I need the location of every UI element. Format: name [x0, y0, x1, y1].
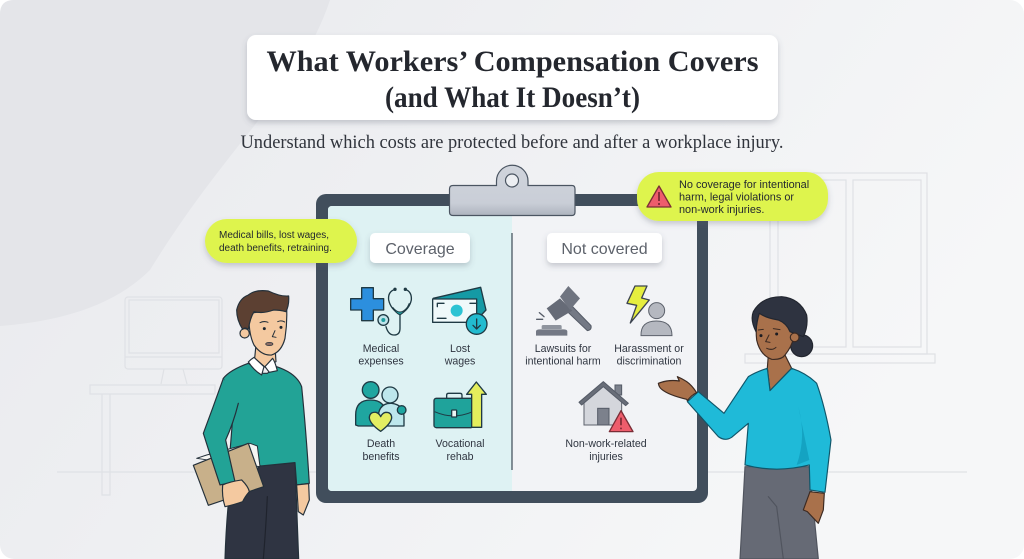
callout: covered summary: Medical bills, lost wages,	[219, 230, 329, 241]
heading: Not covered	[547, 233, 662, 263]
callout: not covered summary: No coverage for intentional	[679, 179, 809, 191]
title: (and What It Doesn’t)	[385, 82, 640, 114]
label: Lost wages: wages	[444, 356, 475, 368]
label: Harassment or discrimination: Harassment or	[614, 343, 684, 355]
callout: not covered summary	[637, 172, 828, 221]
figure: woman presenting	[658, 297, 831, 559]
title: What Workers’ Compensation Covers	[266, 46, 758, 78]
heading: Not covered: Not covered	[561, 241, 648, 258]
icon: medical expenses	[351, 288, 411, 335]
clipboard clip	[450, 165, 575, 216]
icon: vocational rehab	[434, 382, 486, 428]
icon: harassment	[627, 286, 672, 336]
label: Death benefits: Death	[367, 438, 395, 450]
label: Vocational rehab: rehab	[446, 451, 474, 463]
figure: man with folder	[193, 291, 309, 559]
callout: not covered summary: harm, legal violations or	[679, 192, 794, 204]
callout: covered summary: death benefits, retraining.	[219, 243, 332, 254]
heading: Coverage	[370, 233, 470, 263]
label: Non-work-related injuries: Non-work-related	[565, 438, 647, 450]
label: Lawsuits for intentional harm: intentional harm	[525, 356, 601, 368]
label: Lost wages: Lost	[450, 343, 470, 355]
icon: gavel	[536, 286, 591, 336]
label: Non-work-related injuries: injuries	[589, 451, 623, 463]
clipboard	[316, 165, 708, 503]
icon: warning triangle	[647, 186, 671, 207]
heading: Coverage: Coverage	[385, 241, 455, 258]
background: office line art	[57, 173, 967, 495]
icon: non-work injury house	[579, 382, 633, 432]
label: Vocational rehab: Vocational	[436, 438, 484, 450]
label: Medical expenses: Medical	[363, 343, 399, 355]
label: Death benefits: benefits	[362, 451, 400, 463]
label: Lawsuits for intentional harm: Lawsuits for	[535, 343, 591, 355]
label: Medical expenses: expenses	[358, 356, 404, 368]
callout: covered summary	[205, 219, 357, 263]
icon: death benefits	[356, 382, 406, 431]
title	[247, 35, 778, 120]
callout: not covered summary: non-work injuries.	[679, 204, 764, 216]
icon: lost wages	[433, 287, 487, 334]
label: Harassment or discrimination: discrimination	[617, 356, 681, 368]
subtitle: Understand which costs are protected before and after a workplace injury.	[240, 133, 784, 153]
